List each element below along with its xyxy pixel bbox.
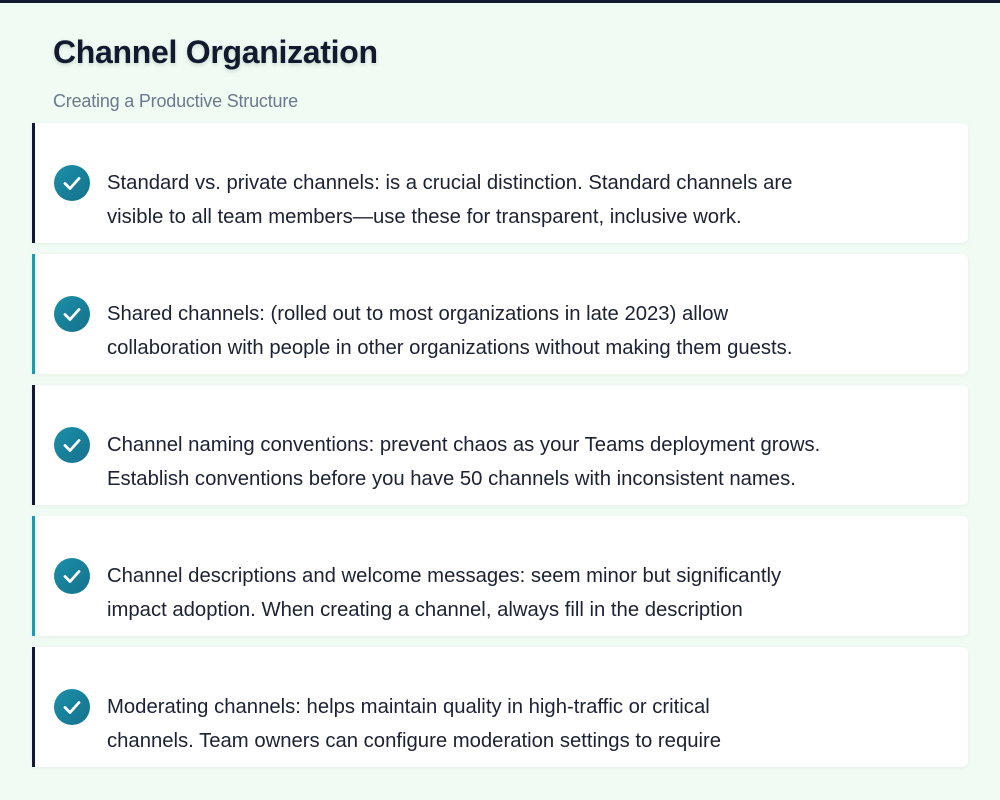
icon: check — [54, 558, 90, 594]
text — [107, 434, 820, 490]
card: standard vs private — [32, 123, 968, 243]
card: naming conventions — [32, 385, 968, 505]
text: channels. Team owners can configure moderation settings to require — [107, 730, 721, 752]
icon: check — [54, 165, 90, 201]
text — [107, 565, 782, 621]
text — [107, 172, 792, 228]
text: Moderating channels: helps maintain quality in high-traffic or critical — [107, 696, 710, 718]
text — [107, 696, 721, 752]
text: Channel naming conventions: prevent chaos as your Teams deployment grows. — [107, 434, 820, 456]
text: Standard vs. private channels: is a crucial distinction. Standard channels are — [107, 172, 792, 194]
icon: check — [54, 689, 90, 725]
card: moderating — [32, 647, 968, 767]
text: Channel descriptions and welcome messages: seem minor but significantly — [107, 565, 781, 587]
text: impact adoption. When creating a channel, always fill in the description — [107, 599, 743, 621]
text: Shared channels: (rolled out to most organizations in late 2023) allow — [107, 303, 728, 325]
text — [107, 303, 792, 359]
text: visible to all team members—use these for transparent, inclusive work. — [107, 206, 742, 228]
icon: check — [54, 427, 90, 463]
subtitle: Creating a Productive Structure — [53, 91, 298, 111]
icon: check — [54, 296, 90, 332]
text: Establish conventions before you have 50 channels with inconsistent names. — [107, 468, 796, 490]
text: collaboration with people in other organizations without making them guests. — [107, 337, 792, 359]
title: Channel Organization — [53, 34, 378, 70]
card: shared channels — [32, 254, 968, 374]
card: descriptions — [32, 516, 968, 636]
